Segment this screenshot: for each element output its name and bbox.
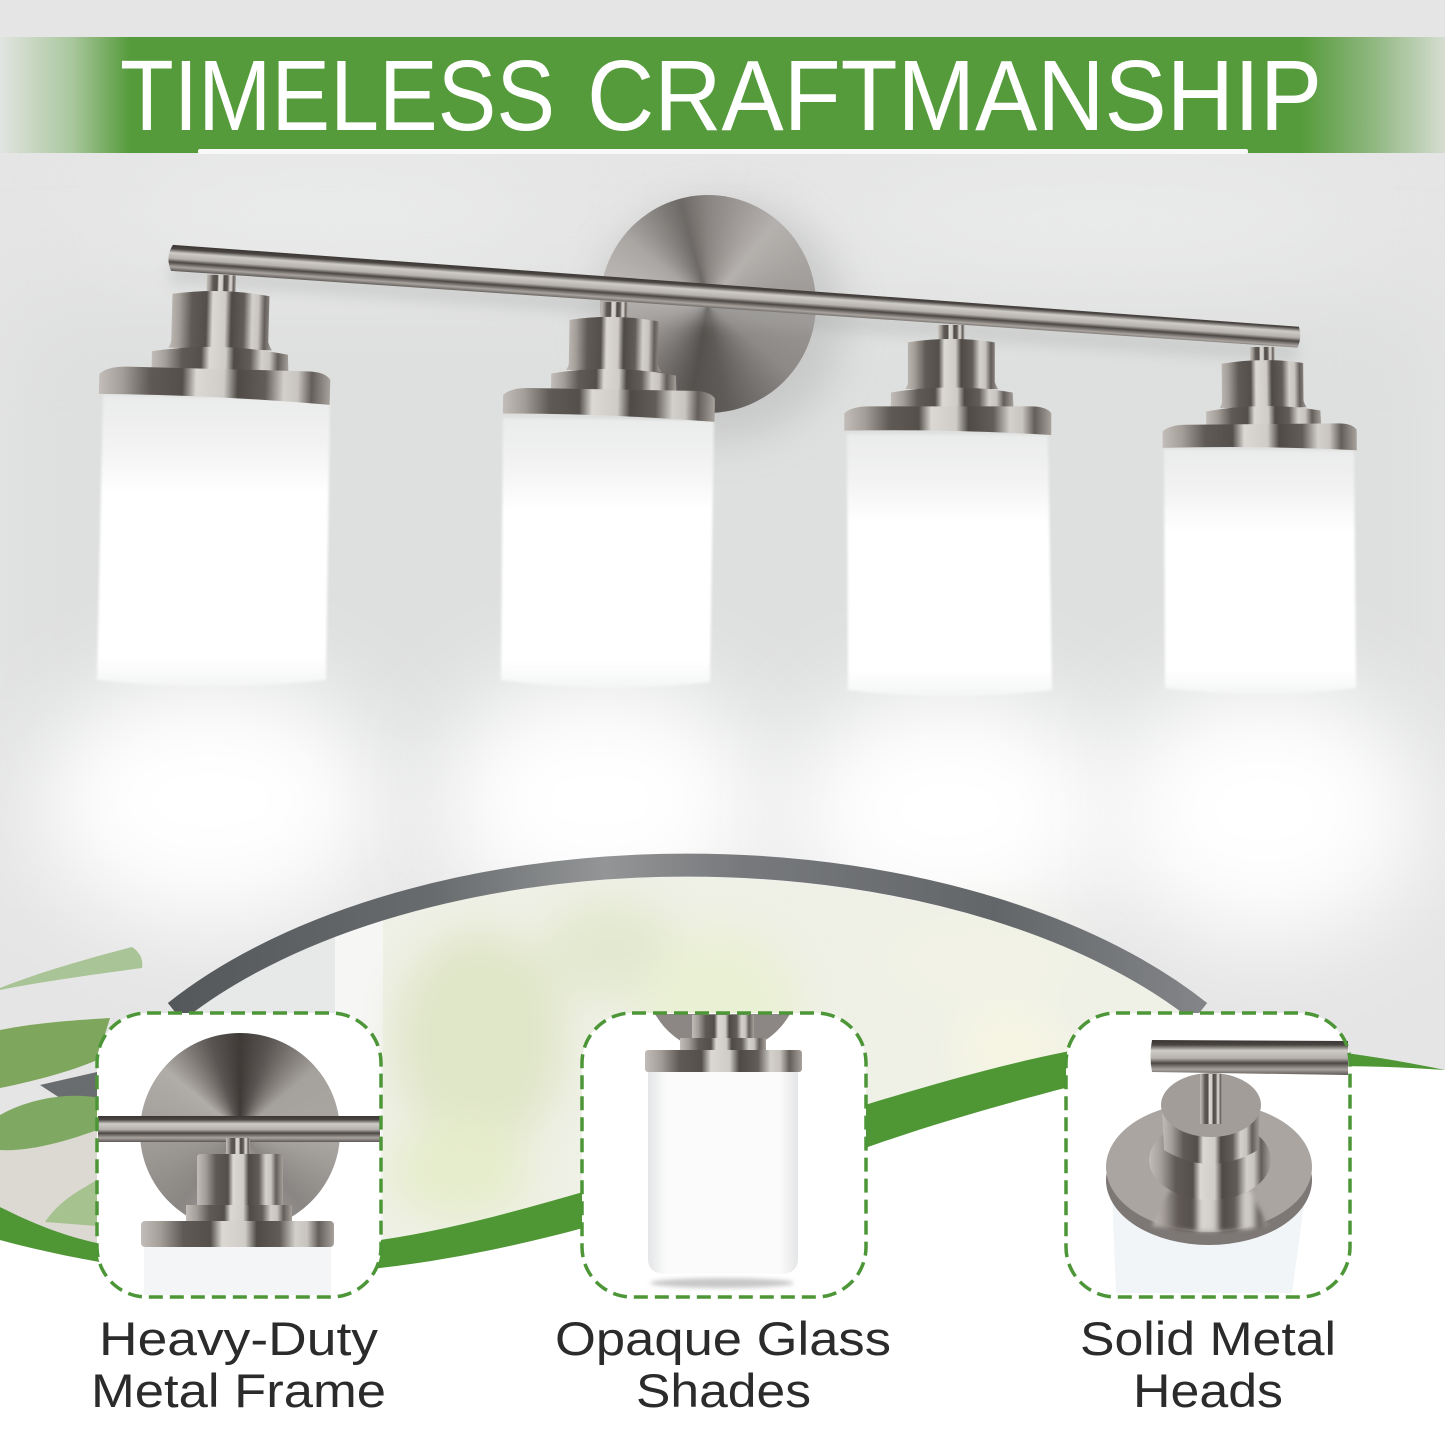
neck — [1149, 1120, 1271, 1200]
lamp 1 — [97, 272, 333, 686]
label: heavy-duty metal frame — [91, 1312, 386, 1417]
glass shade 2 — [501, 418, 714, 688]
lamp 4 — [1162, 346, 1357, 694]
label: solid metal heads: Solid Metal — [1080, 1312, 1336, 1365]
light bar — [167, 245, 1301, 363]
mirror reflection foliage — [390, 900, 1080, 1220]
inset: heavy-duty metal frame — [97, 1013, 381, 1297]
wall plate — [595, 195, 845, 440]
glass shade 4 — [1164, 449, 1356, 694]
flange disc — [1106, 1115, 1312, 1245]
lamp 2 — [501, 300, 717, 688]
mirror — [165, 850, 1205, 1240]
label: opaque glass shades: Shades — [636, 1364, 811, 1417]
label: solid metal heads — [1080, 1312, 1336, 1417]
title: TIMELESS — [120, 40, 555, 152]
plant leaves — [0, 947, 142, 1243]
inset: solid metal heads — [1066, 1013, 1350, 1297]
shadow under shade — [650, 1278, 794, 1288]
glass shade 3 — [847, 434, 1052, 696]
icon: wall plate detail — [140, 1033, 340, 1231]
label: heavy-duty metal frame: Heavy-Duty — [99, 1312, 379, 1365]
glass shade detail — [1112, 1190, 1306, 1293]
banner — [0, 37, 1445, 154]
bar detail — [1150, 1040, 1348, 1075]
lamp head detail — [645, 1014, 802, 1072]
green wave and white base — [0, 1042, 1445, 1445]
lamp 3 — [844, 325, 1052, 696]
title: CRAFTMANSHIP — [587, 40, 1322, 152]
inset: opaque glass shades — [582, 1013, 866, 1297]
label: opaque glass shades: Opaque Glass — [555, 1312, 891, 1365]
glass shade detail — [648, 1070, 798, 1274]
lamp head detail — [141, 1138, 334, 1295]
title — [120, 40, 1322, 152]
label: heavy-duty metal frame: Metal Frame — [91, 1364, 386, 1417]
label: opaque glass shades — [555, 1312, 891, 1417]
glass shade 1 — [97, 395, 330, 686]
bar detail — [98, 1116, 380, 1142]
label: solid metal heads: Heads — [1133, 1364, 1283, 1417]
